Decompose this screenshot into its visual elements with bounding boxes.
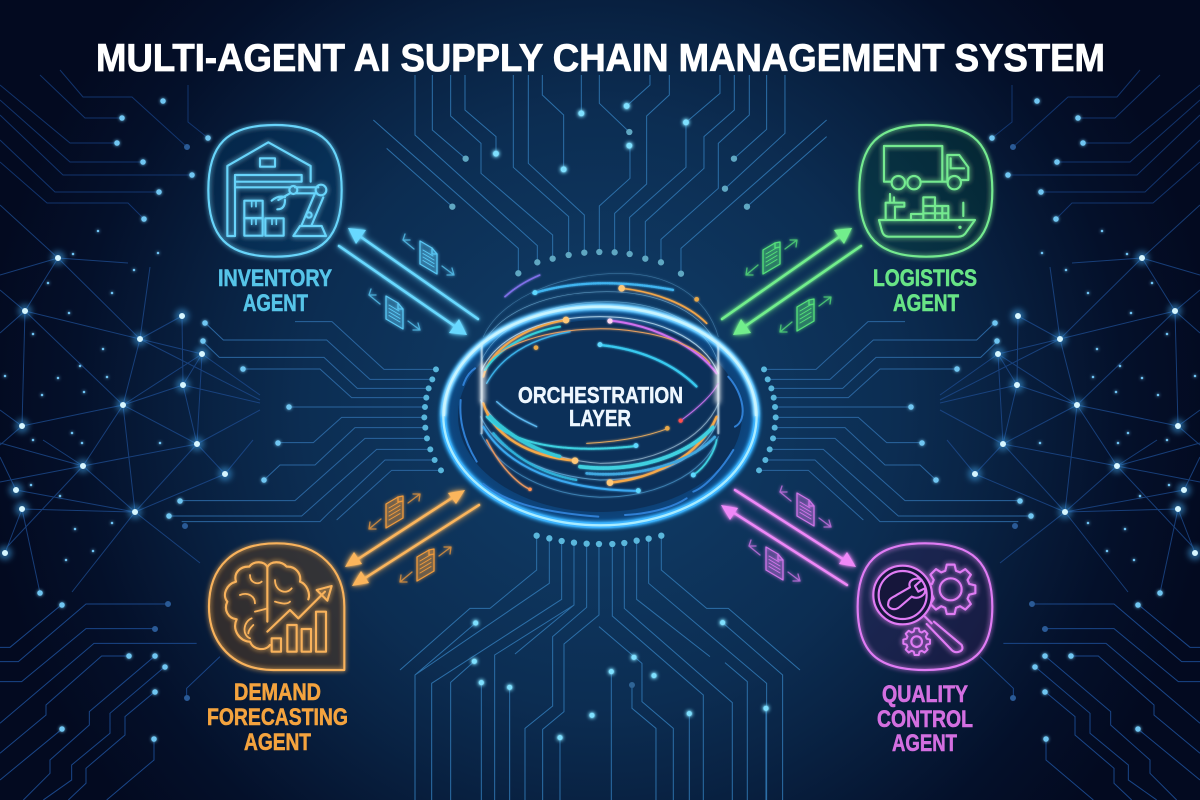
label: logistics agent: AGENT — [893, 290, 959, 317]
arrows: inventory to orchestration — [339, 228, 478, 335]
icon: magnifier with wrench and gears — [858, 543, 992, 670]
icon: brain and growth chart — [209, 543, 344, 670]
bottom circuit traces — [400, 536, 800, 800]
label: quality control agent — [877, 681, 973, 757]
arrows: logistics to orchestration — [722, 228, 861, 335]
ring base — [443, 306, 757, 526]
right ticks around the ring — [759, 369, 776, 470]
label: quality control agent: CONTROL — [877, 706, 973, 733]
icons: documents — [749, 486, 831, 581]
right network and side traces — [759, 70, 1200, 800]
panel: quality control agent — [721, 486, 992, 757]
label: demand forecasting agent: FORECASTING — [207, 704, 348, 731]
top circuit traces — [373, 75, 827, 274]
label: demand forecasting agent: DEMAND — [234, 679, 321, 706]
label: quality control agent: AGENT — [892, 730, 957, 757]
icons: documents — [746, 240, 831, 332]
arrows: quality to orchestration — [721, 490, 856, 585]
orchestration layer — [443, 273, 757, 526]
panel: logistics agent — [722, 125, 992, 335]
icon: truck and cargo ship — [859, 125, 992, 257]
icon: warehouse and robot arm — [208, 125, 342, 257]
orchestration label — [518, 382, 683, 431]
icons: documents — [369, 234, 454, 330]
label: inventory agent: AGENT — [243, 290, 308, 317]
label: demand forecasting agent: AGENT — [244, 729, 311, 756]
title: MULTI-AGENT AI SUPPLY CHAIN MANAGEMENT SYSTEM — [96, 37, 1105, 80]
arrows: demand to orchestration — [345, 490, 479, 586]
orchestration label: ORCHESTRATION — [518, 382, 683, 408]
panel: demand forecasting agent — [207, 490, 479, 756]
label: inventory agent: INVENTORY — [218, 265, 332, 292]
label: logistics agent — [873, 265, 977, 317]
orchestration label: LAYER — [569, 405, 631, 431]
label: logistics agent: LOGISTICS — [873, 265, 977, 292]
left ticks around the ring — [424, 369, 441, 470]
panel: inventory agent — [208, 125, 478, 335]
label: inventory agent — [218, 265, 332, 317]
label: demand forecasting agent — [207, 679, 348, 756]
data swirl — [481, 273, 718, 497]
ring highlights — [444, 307, 756, 416]
left network and side traces — [0, 70, 441, 800]
icons: documents — [369, 494, 451, 582]
label: quality control agent: QUALITY — [882, 681, 968, 708]
